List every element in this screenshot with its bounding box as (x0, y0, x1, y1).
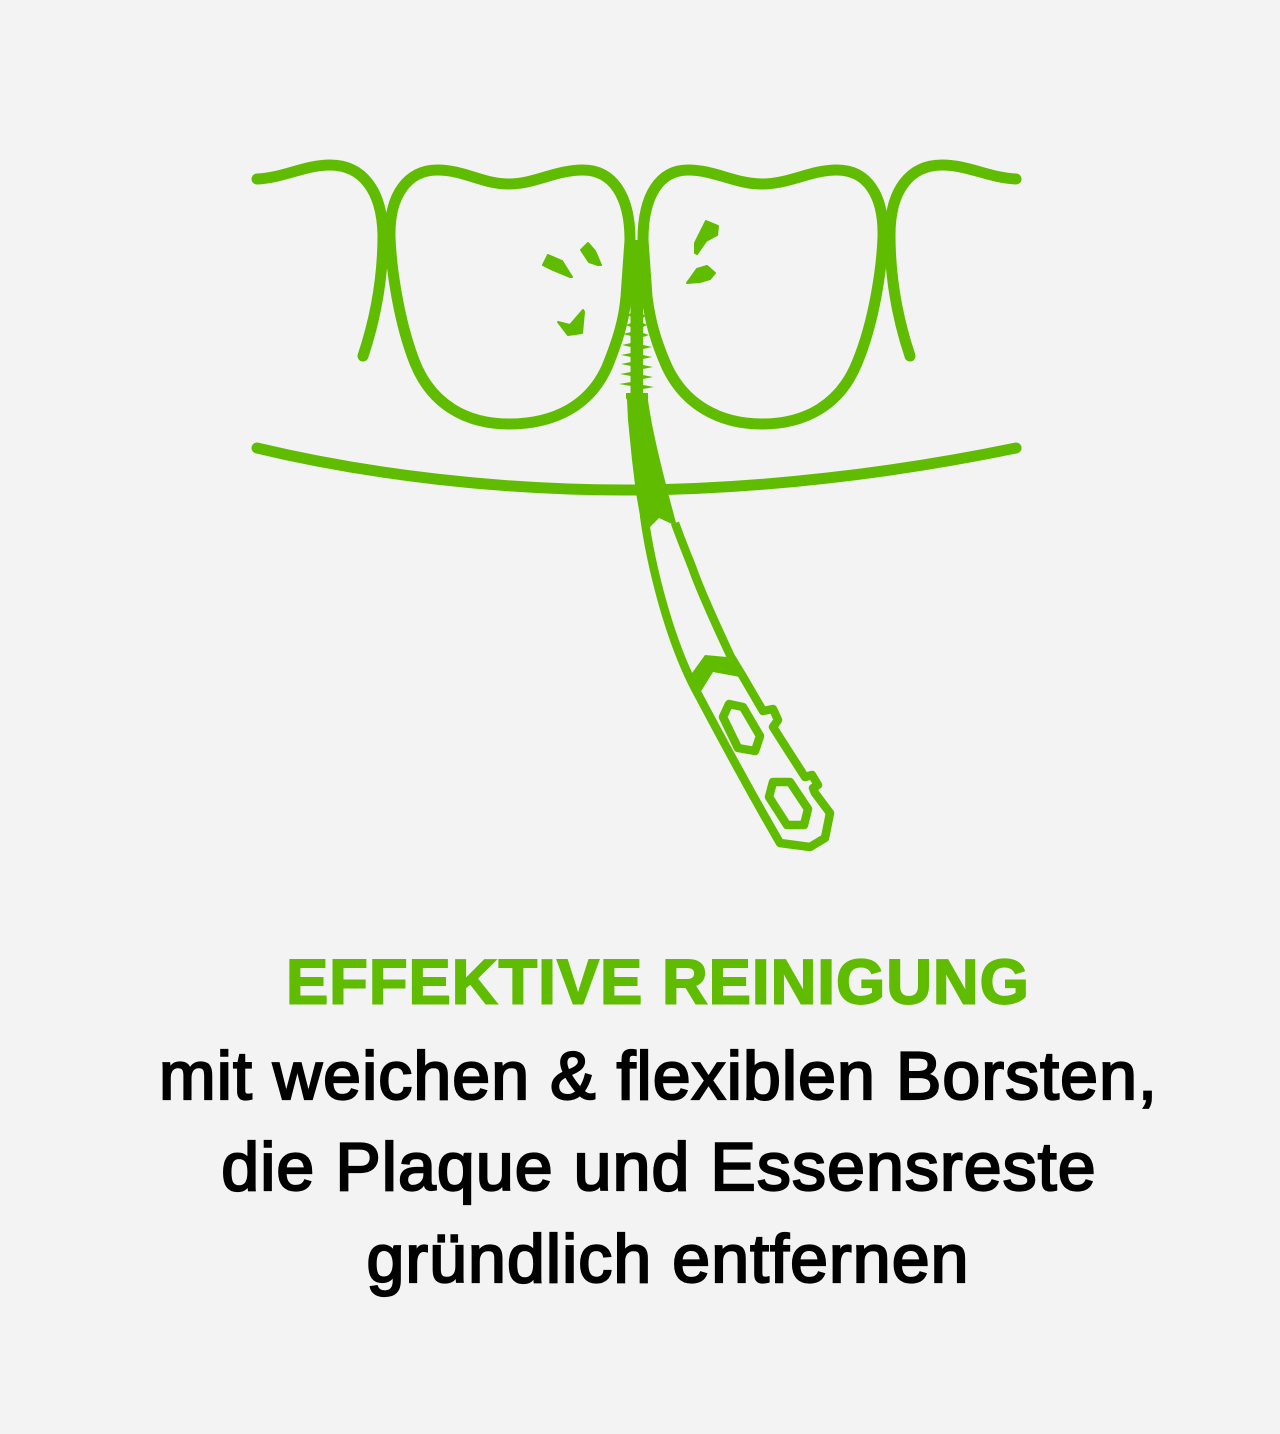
handle outline (644, 515, 830, 847)
hexagon slot (723, 704, 760, 751)
gum base line (257, 448, 1016, 490)
icon: brush neck (626, 393, 676, 527)
illustration: teeth with interdental brush (257, 165, 1016, 847)
left gum line (257, 165, 383, 356)
icon: handle collar (692, 655, 743, 693)
center join between teeth (628, 240, 645, 297)
right gum line (890, 165, 1016, 356)
heading: EFFEKTIVE REINIGUNG (286, 947, 1030, 1017)
right tooth (643, 170, 883, 424)
text block: description: mit weichen & flexiblen Borsten, (159, 1038, 1158, 1114)
icon: plaque fragments (543, 221, 718, 335)
hexagon slot (769, 782, 808, 825)
teeth and gum outlines (257, 165, 1016, 490)
icon: brush handle (644, 515, 830, 847)
text block: description: gründlich entfernen (366, 1221, 970, 1297)
text block: description: die Plaque und Essensreste (221, 1129, 1097, 1205)
text block: description (159, 1038, 1158, 1297)
left tooth (390, 170, 630, 424)
icon: brush bristles (619, 296, 654, 396)
